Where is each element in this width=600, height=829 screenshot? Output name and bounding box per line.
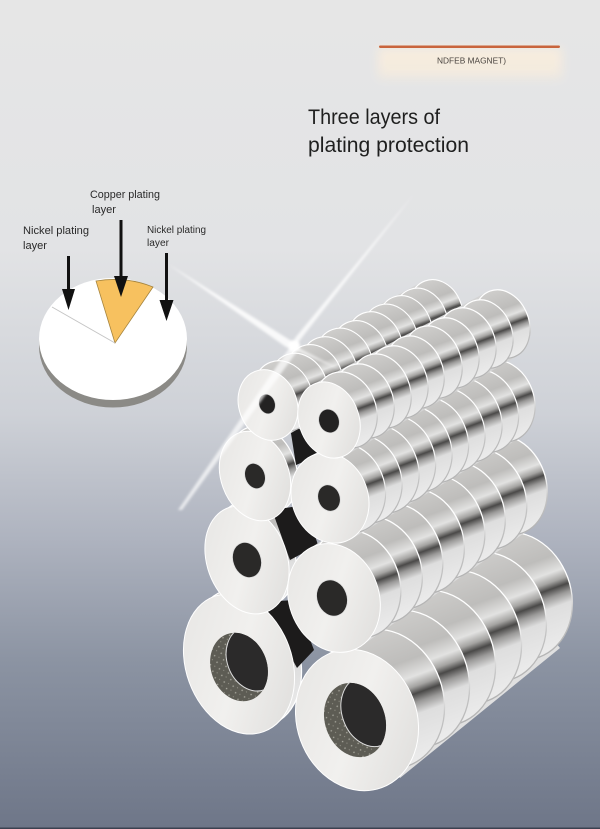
- nickel layer cut line: [52, 307, 115, 343]
- stack: bottom left face: [165, 578, 313, 750]
- counterbore hole: bottom right: [324, 682, 386, 758]
- stack: third row right: [273, 423, 561, 666]
- label: copper plating layer: [90, 189, 160, 216]
- rims behind left stacks: [174, 416, 320, 743]
- sparkle highlight: [168, 194, 414, 510]
- label: left nickel plating layer: [23, 225, 89, 252]
- label: right nickel plating layer: Nickel plating: [147, 225, 206, 236]
- disc edge: [39, 284, 187, 408]
- dark gaps between stacks: [262, 427, 320, 668]
- stack: bottom right: [295, 534, 573, 792]
- stack: second row right: [279, 350, 546, 554]
- badge: NdFeB magnet: [378, 46, 562, 78]
- arrow: left nickel layer: [62, 256, 75, 310]
- counterbore hole: bottom left: [210, 632, 268, 702]
- badge: NdFeB magnet: NDFEB MAGNET): [437, 56, 506, 66]
- disc face: [39, 278, 187, 400]
- title: plating protection: [308, 134, 469, 157]
- plating layers disc diagram: [39, 220, 187, 408]
- label: copper plating layer: layer: [92, 204, 116, 216]
- arrow: copper layer: [114, 220, 128, 297]
- copper wedge: [96, 279, 153, 343]
- title: Three layers of: [308, 106, 440, 129]
- arrow: right nickel layer: [160, 253, 174, 321]
- label: right nickel plating layer: layer: [147, 238, 170, 249]
- label: copper plating layer: Copper plating: [90, 189, 160, 201]
- label: left nickel plating layer: layer: [23, 240, 47, 252]
- title: [308, 106, 469, 157]
- magnet stack photo: [182, 279, 573, 792]
- stack: top row back: [228, 272, 471, 449]
- stack: third row left: [190, 494, 304, 626]
- label: right nickel plating layer: [147, 225, 206, 249]
- stack: top row front: [287, 282, 539, 467]
- stack: second row left: [207, 421, 303, 531]
- label: left nickel plating layer: Nickel plating: [23, 225, 89, 237]
- bottom edge line: [0, 828, 600, 829]
